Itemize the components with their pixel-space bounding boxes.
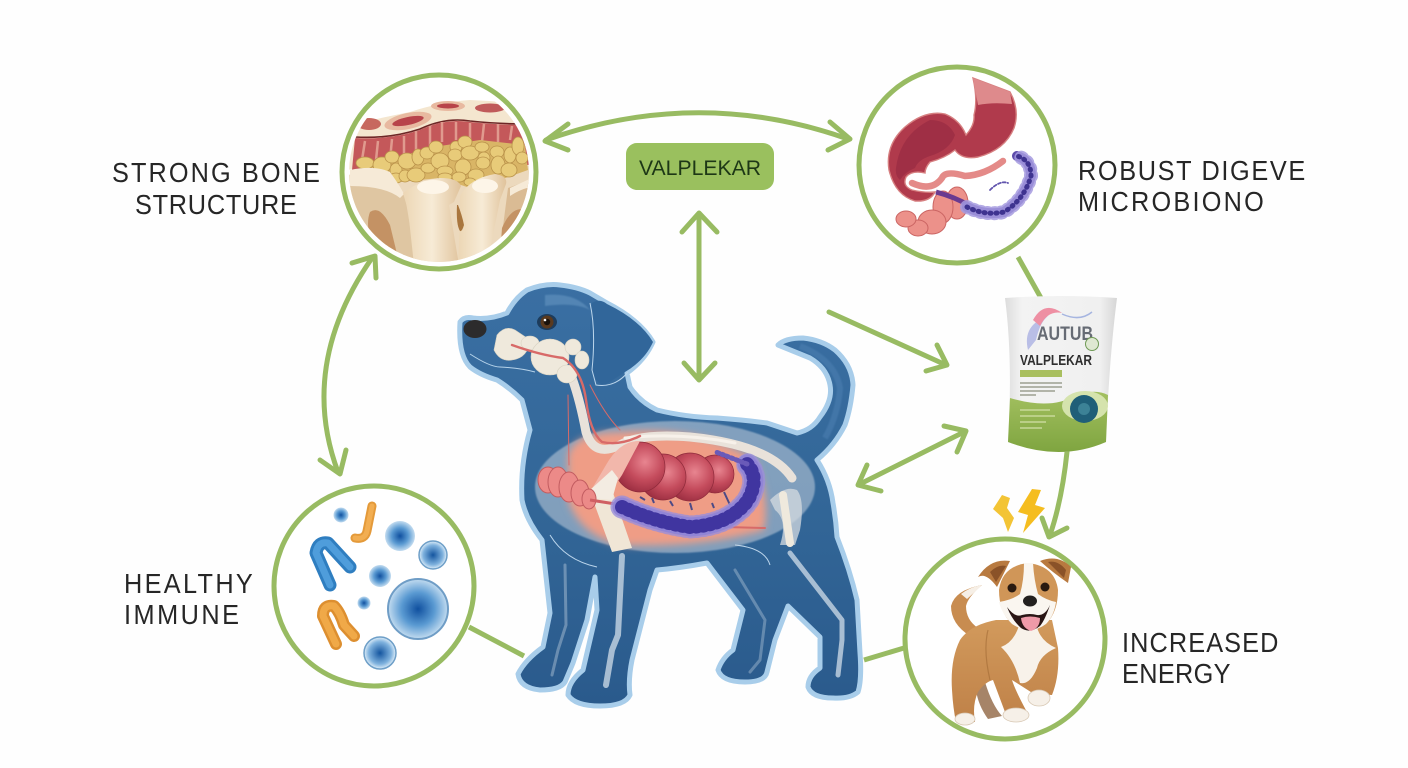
bag product name: VALPLEKAR bbox=[1020, 353, 1092, 369]
arrow: bone to immune curved double arrow bbox=[320, 256, 376, 474]
label: strong bone structure: STRONG BONE bbox=[112, 157, 320, 188]
dog nose bbox=[464, 320, 486, 338]
arrow: dog to product bag bbox=[829, 312, 947, 371]
label: increased energy: ENERGY bbox=[1122, 658, 1231, 689]
outer cream layer bbox=[345, 100, 535, 170]
dog silhouette bbox=[460, 285, 861, 706]
small intestine bbox=[896, 187, 968, 236]
immune cells bbox=[334, 508, 348, 522]
hip bones bbox=[770, 489, 802, 545]
bone columns bbox=[350, 186, 416, 259]
dog anatomy illustration bbox=[460, 285, 861, 706]
red marrow layer bbox=[352, 121, 530, 170]
skull bones bbox=[494, 328, 589, 383]
arrow: vertical double arrow from label to dog bbox=[682, 213, 717, 380]
icon: puppy ears bbox=[978, 561, 1010, 587]
label: healthy immune: IMMUNE bbox=[124, 599, 239, 630]
blue bacterium bbox=[316, 543, 350, 585]
purple link bbox=[936, 192, 970, 206]
stomach neck bbox=[590, 441, 640, 492]
label pill: VALPLEKAR: VALPLEKAR bbox=[639, 156, 761, 180]
panel: digestive microbiome circle bbox=[859, 67, 1055, 263]
panel: immune cells circle bbox=[274, 486, 474, 686]
leg bones bbox=[552, 553, 842, 685]
product bag bbox=[1005, 296, 1117, 452]
dog eye bbox=[537, 314, 557, 330]
belly fold lines bbox=[550, 535, 770, 567]
nerve and vessel lines bbox=[512, 345, 765, 528]
label: robust digestive microbiome bbox=[1078, 155, 1305, 217]
icon: puppy paws bbox=[955, 690, 1050, 725]
label: healthy immune bbox=[124, 568, 253, 630]
microbiome band bbox=[967, 156, 1031, 213]
icon: puppy head bbox=[999, 563, 1058, 629]
panel: energy circle bbox=[905, 539, 1105, 739]
label: healthy immune: HEALTHY bbox=[124, 568, 253, 599]
label: robust digestive microbiome: MICROBIONO bbox=[1078, 186, 1264, 217]
bag brand name: AUTUB bbox=[1037, 324, 1093, 345]
dog tail shading bbox=[800, 346, 840, 438]
connector: energy circle to dog bbox=[864, 648, 904, 660]
label: robust digestive microbiome: ROBUST DIGEVE bbox=[1078, 155, 1305, 186]
stomach bbox=[888, 78, 1016, 201]
orange bacterium n bbox=[323, 606, 354, 644]
body translucent window bbox=[535, 421, 815, 553]
pink tube bbox=[912, 161, 1003, 187]
label pill: VALPLEKAR bbox=[626, 143, 774, 190]
villi bbox=[640, 492, 730, 510]
dog mouth line bbox=[470, 354, 535, 372]
icon: puppy eyes and nose bbox=[1008, 584, 1016, 592]
stomach lobes bbox=[615, 442, 734, 501]
icon: puppy tail bbox=[951, 585, 982, 636]
orange bacterium J bbox=[355, 506, 372, 538]
dog head highlight bbox=[545, 295, 590, 310]
spine and oesophagus bbox=[572, 378, 792, 478]
yellow granules bbox=[358, 140, 528, 188]
arrow: bone to digestive curved double arrow bbox=[545, 113, 850, 150]
label: increased energy bbox=[1122, 627, 1278, 689]
arrow: product bag to dog double arrow bbox=[858, 426, 966, 491]
pink intestine coils bbox=[538, 467, 596, 509]
lower bone base bbox=[349, 165, 529, 262]
label: increased energy: INCREASED bbox=[1122, 627, 1278, 658]
icon: puppy body bbox=[952, 620, 1058, 722]
bag brand swooshes bbox=[1027, 316, 1048, 350]
label: strong bone structure bbox=[112, 157, 320, 220]
purple microbiome band bbox=[622, 452, 754, 527]
icon: puppy back leg bbox=[976, 682, 1002, 719]
dog ear bbox=[590, 301, 653, 385]
bag green lower panel bbox=[1008, 392, 1108, 452]
icon: lightning bolts bbox=[993, 489, 1045, 533]
body pink cavity bbox=[568, 431, 766, 545]
connector: immune circle to dog bbox=[469, 627, 524, 656]
icon: puppy chest bbox=[1001, 622, 1056, 683]
shoulder bone bbox=[590, 484, 632, 552]
panel: bone structure circle bbox=[342, 75, 540, 270]
label: strong bone structure: STRUCTURE bbox=[135, 189, 297, 220]
connector: digestive circle to bag bbox=[1018, 257, 1041, 298]
dog ear edge line bbox=[590, 303, 628, 385]
icon: puppy mouth bbox=[1007, 605, 1050, 631]
bag badge bbox=[1062, 391, 1108, 421]
arrow: bag to energy circle bbox=[1042, 452, 1067, 537]
